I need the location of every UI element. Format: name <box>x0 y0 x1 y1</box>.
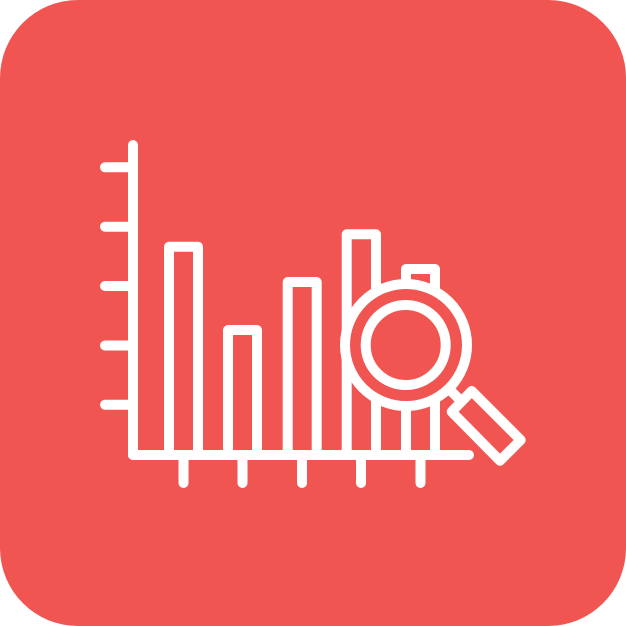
bar 5 <box>406 269 435 455</box>
lens inner ring <box>366 305 446 385</box>
lens outer ring <box>345 284 467 406</box>
bar 1 <box>169 247 198 455</box>
x-axis ticks <box>184 455 420 483</box>
bar 3 <box>288 282 317 455</box>
handle connector <box>449 389 461 401</box>
horizontal axis <box>133 450 469 460</box>
bar 4 <box>347 234 376 455</box>
bar 2 <box>228 330 257 455</box>
icon: magnifying glass <box>345 284 521 461</box>
handle <box>452 391 521 461</box>
vertical axis <box>128 145 138 455</box>
bar chart <box>105 145 469 483</box>
y-axis ticks <box>105 167 133 405</box>
